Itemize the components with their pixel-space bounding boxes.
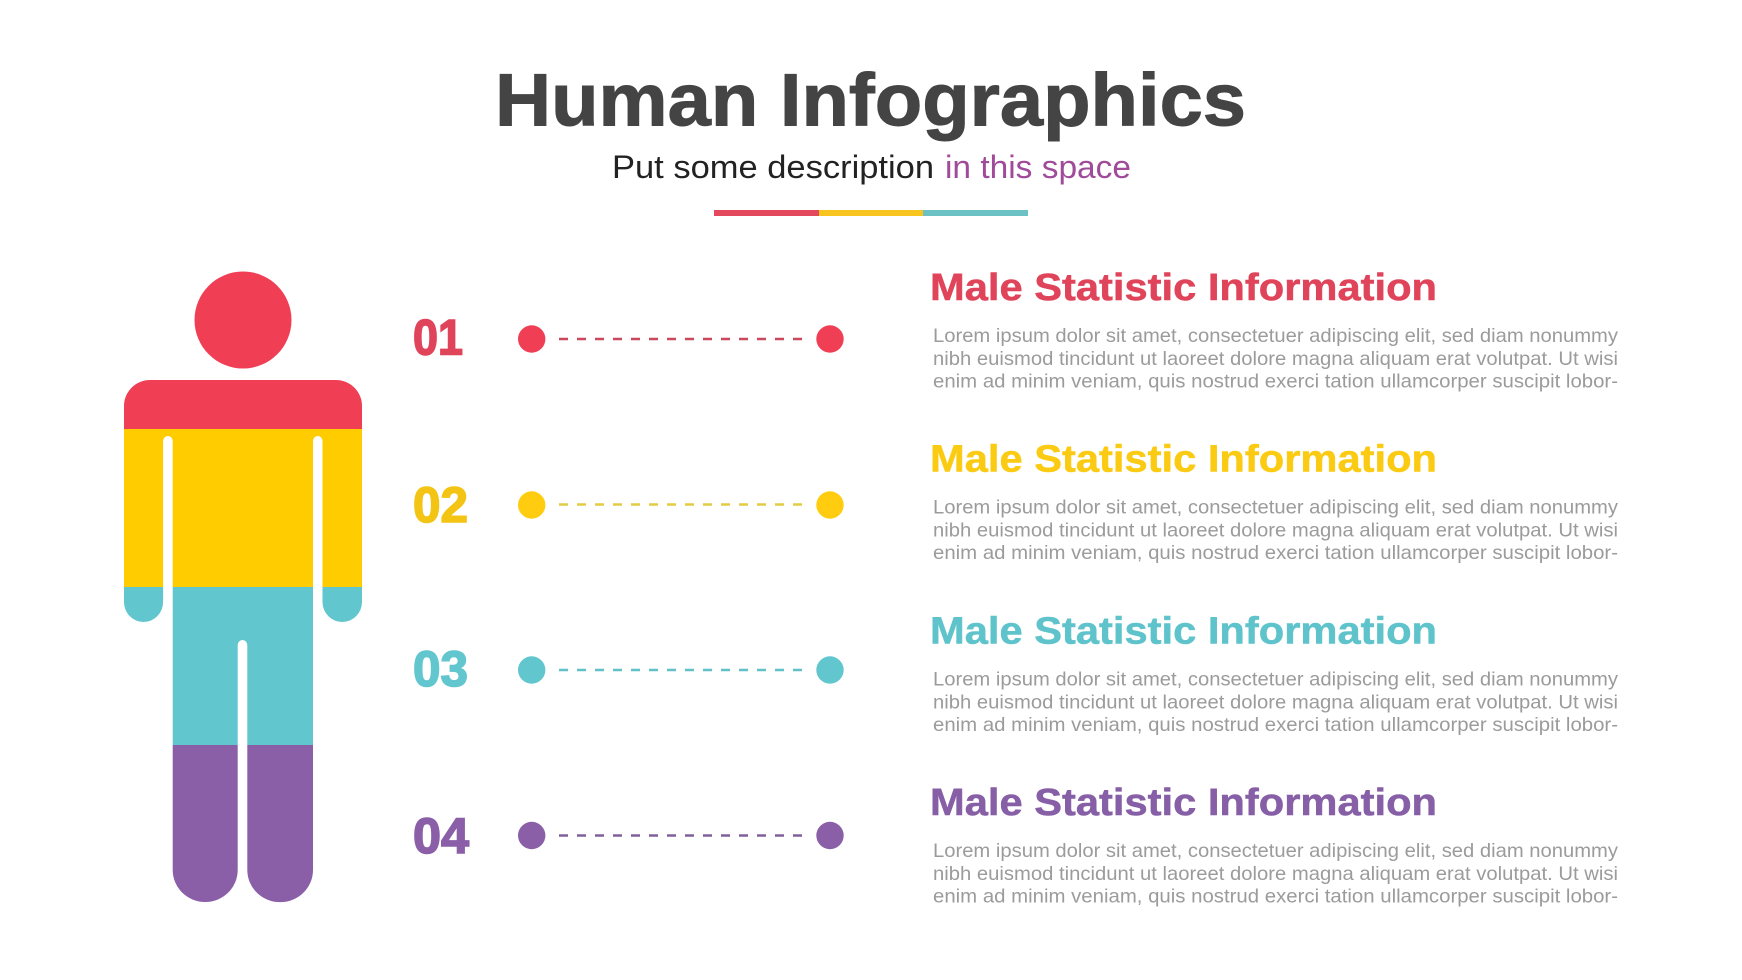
subtitle (612, 149, 1131, 185)
info block 3: Male Statistic Information (930, 610, 1437, 652)
info block 3: enim ad minim veniam, quis nostrud exerci tation ullamcorper suscipit lobor- (933, 714, 1618, 736)
subtitle: in this space (945, 149, 1131, 185)
info block 1: Male Statistic Information (930, 267, 1437, 309)
info block 2: enim ad minim veniam, quis nostrud exerci tation ullamcorper suscipit lobor- (933, 542, 1618, 564)
info block 2: Lorem ipsum dolor sit amet, consectetuer adipiscing elit, sed diam nonummy (933, 497, 1618, 519)
human figure (120, 272, 366, 907)
row 04 connector: 04 (413, 808, 469, 864)
info block 1: enim ad minim veniam, quis nostrud exerci tation ullamcorper suscipit lobor- (933, 370, 1618, 392)
info block 2 (930, 439, 1618, 564)
row 02 connector (413, 477, 844, 533)
info block 1: nibh euismod tincidunt ut laoreet dolore magna aliquam erat volutpat. Ut wisi (933, 348, 1618, 370)
row 03 connector (413, 641, 844, 697)
info block 3 (930, 610, 1618, 736)
subtitle: Put some description (612, 149, 934, 185)
info block 4: enim ad minim veniam, quis nostrud exerci tation ullamcorper suscipit lobor- (933, 886, 1618, 908)
info block 1 (930, 267, 1618, 392)
info block 2: nibh euismod tincidunt ut laoreet dolore magna aliquam erat volutpat. Ut wisi (933, 520, 1618, 542)
title accent bar (714, 210, 1028, 216)
row 03 connector: 03 (413, 641, 468, 697)
info block 4: Male Statistic Information (930, 782, 1437, 824)
info block 3: Lorem ipsum dolor sit amet, consectetuer adipiscing elit, sed diam nonummy (933, 668, 1618, 690)
figure head (194, 272, 292, 368)
info block 4 (930, 782, 1618, 908)
row 02 connector: 02 (413, 477, 468, 533)
info block 3: nibh euismod tincidunt ut laoreet dolore magna aliquam erat volutpat. Ut wisi (933, 691, 1618, 713)
info block 1: Lorem ipsum dolor sit amet, consectetuer adipiscing elit, sed diam nonummy (933, 325, 1618, 347)
row 04 connector (413, 808, 844, 864)
info block 4: nibh euismod tincidunt ut laoreet dolore magna aliquam erat volutpat. Ut wisi (933, 863, 1618, 885)
title: Human Infographics (495, 58, 1246, 142)
info block 4: Lorem ipsum dolor sit amet, consectetuer adipiscing elit, sed diam nonummy (933, 840, 1618, 862)
row 01 connector: 01 (413, 310, 463, 366)
info block 2: Male Statistic Information (930, 439, 1437, 481)
row 01 connector (413, 310, 844, 366)
figure body bands (120, 377, 366, 907)
